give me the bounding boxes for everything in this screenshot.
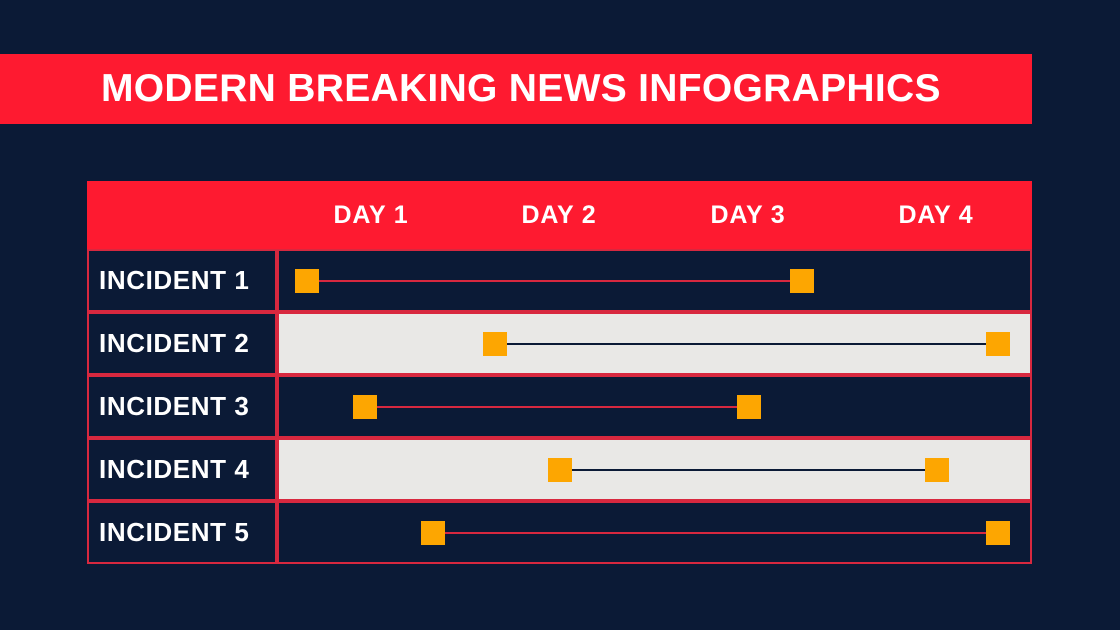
row 5 cell (277, 501, 1032, 564)
label: incident 2 (87, 312, 277, 375)
row 3 cell (277, 375, 1032, 438)
timeline bar: incident 3 (353, 395, 761, 419)
row 1 cell (277, 249, 1032, 312)
label: incident 4: INCIDENT 4 (99, 454, 249, 484)
label: incident 1 (87, 249, 277, 312)
row 4 cell (277, 438, 1032, 501)
label: incident 1: INCIDENT 1 (99, 265, 249, 295)
label: incident 5 (87, 501, 277, 564)
label: incident 3 (87, 375, 277, 438)
timeline bar: incident 2 (483, 332, 1010, 356)
label: incident 4 (87, 438, 277, 501)
header: day 3: DAY 3 (711, 201, 785, 229)
timeline bar: incident 4 (548, 458, 949, 482)
label: incident 3: INCIDENT 3 (99, 391, 249, 421)
timeline bar: incident 5 (421, 521, 1010, 545)
header: day 4: DAY 4 (899, 201, 973, 229)
header: day 2: DAY 2 (522, 201, 596, 229)
timeline bar: incident 1 (295, 269, 814, 293)
table header (87, 181, 1032, 249)
label: incident 5: INCIDENT 5 (99, 517, 249, 547)
label: incident 2: INCIDENT 2 (99, 328, 249, 358)
row 2 cell (277, 312, 1032, 375)
title banner: MODERN BREAKING NEWS INFOGRAPHICS (101, 67, 941, 110)
header: day 1: DAY 1 (334, 201, 408, 229)
title banner (0, 54, 1032, 124)
